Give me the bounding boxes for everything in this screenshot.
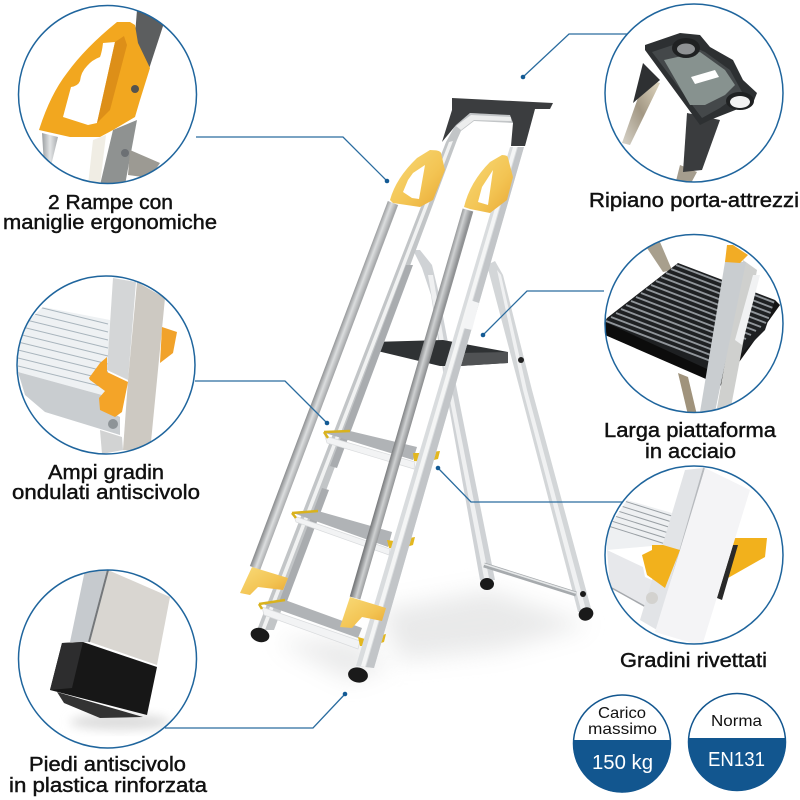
heading: steps: ondulati antiscivolo bbox=[12, 482, 200, 504]
leader lines bbox=[165, 34, 627, 728]
badge: standard: Norma bbox=[711, 713, 762, 730]
heading: feet: in plastica rinforzata bbox=[9, 775, 208, 797]
badge: maximum load bbox=[573, 695, 671, 793]
heading: platform: in acciaio bbox=[645, 441, 736, 463]
heading: steps bbox=[12, 462, 200, 504]
badge: maximum load: 150 kg bbox=[592, 752, 653, 774]
heading: riveted steps: Gradini rivettati bbox=[620, 650, 767, 672]
heading: tool shelf: Ripiano porta-attrezzi bbox=[589, 190, 799, 212]
heading: handle: 2 Rampe con bbox=[48, 192, 173, 214]
heading: feet: Piedi antiscivolo bbox=[29, 754, 186, 776]
heading: feet bbox=[9, 754, 208, 797]
platform bbox=[370, 340, 524, 366]
left handrail bbox=[255, 203, 393, 568]
lower left yellow bracket bbox=[240, 567, 288, 595]
heading: platform bbox=[604, 420, 777, 463]
floor shadow bbox=[275, 590, 590, 680]
top tool shelf bbox=[442, 98, 553, 146]
rear cross bar bbox=[484, 564, 576, 594]
panel: ergonomic handle detail bbox=[18, 6, 196, 185]
step 3 bbox=[259, 600, 386, 649]
lower right yellow bracket bbox=[340, 597, 386, 628]
panel: tool shelf detail bbox=[605, 4, 783, 185]
heading: handle: maniglie ergonomiche bbox=[3, 212, 217, 234]
heading: handle bbox=[3, 192, 217, 234]
panel: ribbed steps detail bbox=[17, 276, 195, 454]
step 2 bbox=[292, 511, 415, 555]
panel: steel platform detail bbox=[605, 234, 786, 415]
panel: feet detail bbox=[18, 570, 196, 748]
badge: maximum load: Carico bbox=[598, 705, 646, 722]
upper arch and left rail bbox=[257, 113, 513, 630]
right handle bbox=[464, 155, 513, 213]
feet bbox=[249, 578, 596, 684]
panel: riveted steps detail bbox=[605, 466, 783, 646]
badge: standard: EN131 bbox=[708, 749, 765, 771]
badge: maximum load: massimo bbox=[588, 721, 657, 738]
right handrail bbox=[355, 210, 468, 598]
leader dots bbox=[325, 75, 525, 696]
ladder illustration bbox=[240, 98, 596, 684]
badge: standard bbox=[688, 694, 786, 791]
rear legs bbox=[413, 250, 592, 612]
right rail bbox=[356, 147, 524, 668]
heading: steps: Ampi gradin bbox=[48, 462, 164, 484]
left handle bbox=[390, 150, 445, 207]
step 1 bbox=[324, 431, 440, 469]
heading: platform: Larga piattaforma bbox=[604, 420, 777, 442]
